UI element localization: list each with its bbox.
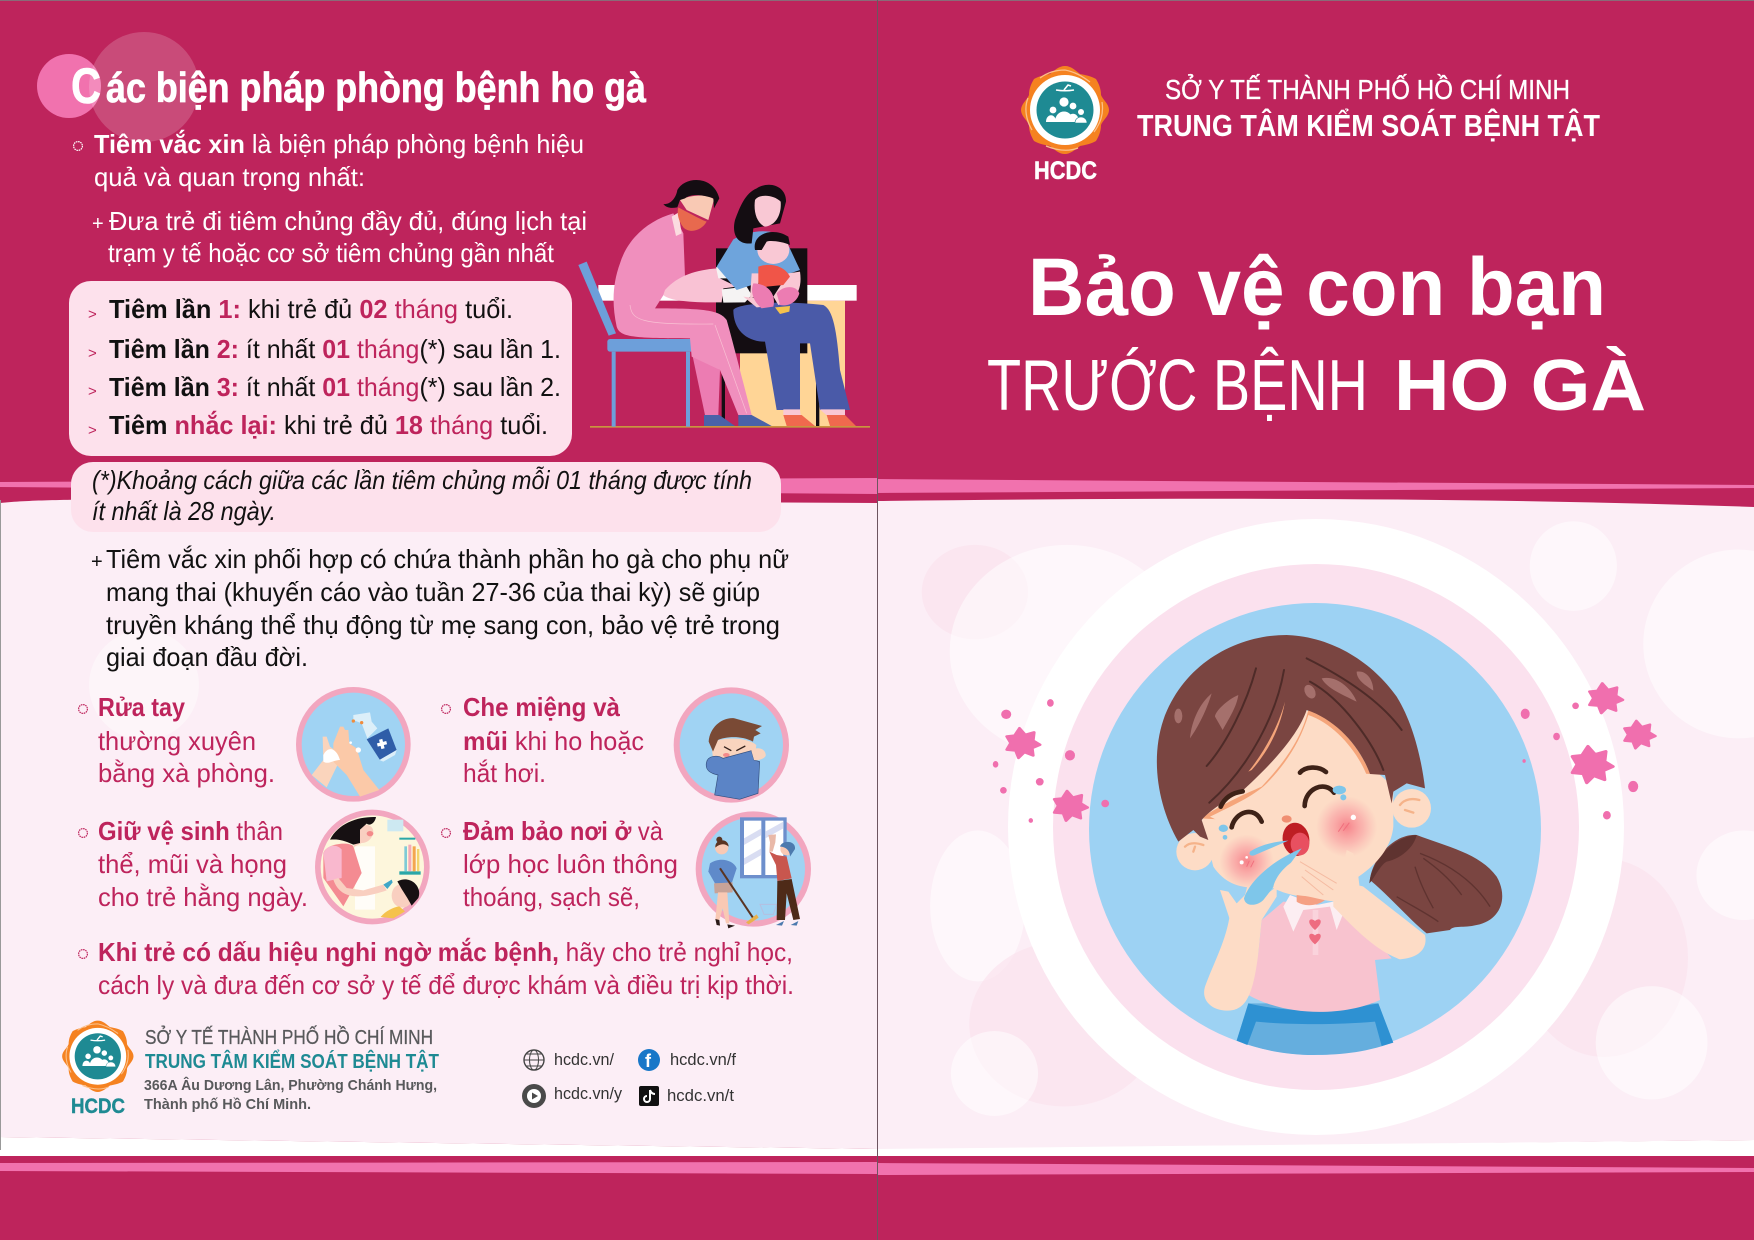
panel: cover bbox=[922, 66, 1754, 1135]
item: hygiene: Giữ vệ sinh thân bbox=[98, 816, 283, 846]
girl: tears bbox=[1219, 825, 1228, 832]
illustration: nurse vaccinating child bbox=[578, 180, 870, 428]
schedule: dose 3: Tiêm lần 3: ít nhất 01 tháng(*) sau lần 2. bbox=[109, 372, 561, 402]
footer: website: hcdc.vn/ bbox=[554, 1050, 614, 1069]
footer: tiktok: hcdc.vn/t bbox=[667, 1086, 734, 1105]
footer: youtube bbox=[522, 1084, 622, 1108]
schedule: booster: > bbox=[88, 422, 97, 439]
logo: HCDC: HCDC bbox=[71, 1095, 125, 1118]
schedule: dose 1: > bbox=[88, 306, 97, 323]
organisation name and address: TRUNG TÂM KIỂM SOÁT BỆNH TẬT bbox=[145, 1049, 439, 1073]
footer: youtube: hcdc.vn/y bbox=[554, 1084, 622, 1103]
footer: tiktok bbox=[639, 1086, 734, 1106]
text block: maternal vaccination: mang thai (khuyến cáo vào tuần 27-36 của thai kỳ) sẽ giúp bbox=[106, 577, 760, 607]
text block: maternal vaccination: Tiêm vắc xin phối hợp có chứa thành phần ho gà cho phụ nữ bbox=[106, 544, 789, 574]
girl: hand over mouth bbox=[1273, 850, 1360, 901]
text block: maternal vaccination: giai đoạn đầu đời. bbox=[106, 642, 308, 672]
title: Bảo vệ con bạn bbox=[1028, 242, 1606, 333]
item: hygiene: thể, mũi và họng bbox=[98, 849, 287, 879]
item: hand washing bbox=[79, 692, 275, 788]
organisation name and address bbox=[144, 1025, 439, 1113]
text block: maternal vaccination bbox=[91, 544, 789, 672]
title: TRƯỚC BỆNH bbox=[987, 346, 1368, 426]
text block: when child has symptoms: Khi trẻ có dấu hiệu nghi ngờ mắc bệnh, hãy cho trẻ nghỉ học, bbox=[98, 937, 793, 967]
heading: C bbox=[71, 58, 101, 114]
nurse chair bbox=[578, 262, 616, 336]
footnote box bbox=[71, 462, 781, 532]
footer: facebook: f bbox=[645, 1051, 652, 1071]
child bbox=[750, 273, 759, 298]
icon: cleaning window and floor bbox=[696, 811, 811, 928]
girl: raised arm bbox=[1204, 913, 1262, 1011]
nurse bbox=[704, 415, 772, 426]
item: hand washing: bằng xà phòng. bbox=[98, 758, 275, 788]
footnote box: (*)Khoảng cách giữa các lần tiêm chủng mỗi 01 tháng được tính bbox=[92, 465, 752, 495]
icon: hand washing bbox=[296, 687, 411, 802]
heading decoration circles bbox=[37, 32, 199, 142]
schedule: booster: Tiêm nhắc lại: khi trẻ đủ 18 tháng tuổi. bbox=[109, 410, 548, 440]
item: hand washing: thường xuyên bbox=[98, 726, 256, 756]
text block: when child has symptoms bbox=[79, 937, 794, 1000]
background bubbles bbox=[922, 521, 1754, 1116]
girl: skirt bbox=[1237, 1003, 1393, 1055]
organisation header bbox=[1137, 73, 1600, 143]
girl: nose and mouth bbox=[1282, 815, 1292, 823]
title bbox=[987, 242, 1646, 426]
text block: vaccination intro: + bbox=[92, 213, 104, 235]
text block: when child has symptoms: cách ly và đưa đến cơ sở y tế để được khám và điều trị kịp thời. bbox=[98, 970, 794, 1000]
organisation name and address: 366A Âu Dương Lân, Phường Chánh Hưng, bbox=[144, 1076, 437, 1094]
organisation name and address: Thành phố Hồ Chí Minh. bbox=[144, 1096, 311, 1113]
girl: face bbox=[1202, 710, 1393, 897]
item: cover mouth: mũi khi ho hoặc bbox=[463, 726, 644, 756]
item: hygiene: cho trẻ hằng ngày. bbox=[98, 882, 308, 912]
footer: website bbox=[524, 1050, 614, 1070]
heading bbox=[71, 58, 647, 114]
heading: ác biện pháp phòng bệnh ho gà bbox=[106, 64, 647, 111]
girl: shirt bbox=[1248, 902, 1392, 1012]
organisation name and address: SỞ Y TẾ THÀNH PHỐ HỒ CHÍ MINH bbox=[145, 1025, 433, 1049]
girl: ponytail bbox=[1370, 835, 1502, 933]
schedule: dose 1: Tiêm lần 1: khi trẻ đủ 02 tháng tuổi. bbox=[109, 294, 513, 324]
item: clean classroom: Đảm bảo nơi ở và bbox=[463, 816, 663, 846]
item: clean classroom bbox=[442, 816, 678, 912]
schedule: dose 2: Tiêm lần 2: ít nhất 01 tháng(*) sau lần 1. bbox=[109, 334, 561, 364]
item: cover mouth bbox=[442, 692, 644, 788]
text block: vaccination intro: Đưa trẻ đi tiêm chủng đầy đủ, đúng lịch tại bbox=[109, 206, 587, 236]
schedule: dose 2: > bbox=[88, 345, 97, 362]
icon: coughing boy bbox=[674, 687, 789, 803]
girl: cheeks bbox=[1219, 834, 1274, 889]
footer: facebook bbox=[638, 1049, 736, 1071]
item: cover mouth: Che miệng và bbox=[463, 692, 620, 722]
portrait frame circles bbox=[1008, 519, 1624, 1135]
panel: prevention measures bbox=[37, 32, 870, 1118]
text block: vaccination intro: quả và quan trọng nhất: bbox=[94, 162, 365, 192]
footer: organisation bbox=[62, 1021, 439, 1118]
schedule: dose 3: > bbox=[88, 383, 97, 400]
item: hygiene bbox=[79, 816, 308, 912]
icon: mother cleaning child's nose bbox=[315, 810, 430, 924]
item: cover mouth: hắt hơi. bbox=[463, 758, 546, 788]
girl: hair bbox=[1201, 710, 1370, 820]
footnote box: ít nhất là 28 ngày. bbox=[92, 496, 276, 526]
mother bbox=[717, 231, 800, 290]
item: clean classroom: thoáng, sạch sẽ, bbox=[463, 882, 640, 912]
girl: arm to mouth bbox=[1333, 886, 1426, 959]
item: clean classroom: lớp học luôn thông bbox=[463, 849, 678, 879]
logo: HCDC bbox=[62, 1021, 134, 1118]
germs around girl bbox=[993, 683, 1655, 823]
girl: eyes and brows bbox=[1232, 787, 1334, 827]
logo: HCDC white: HCDC bbox=[1034, 157, 1097, 185]
text block: vaccination intro bbox=[74, 129, 587, 268]
organisation header: SỞ Y TẾ THÀNH PHỐ HỒ CHÍ MINH bbox=[1165, 73, 1570, 105]
text block: vaccination intro: Tiêm vắc xin là biện pháp phòng bệnh hiệu bbox=[94, 129, 584, 159]
text block: maternal vaccination: truyền kháng thể thụ động từ mẹ sang con, bảo vệ trẻ trong bbox=[106, 610, 780, 640]
footer: facebook: hcdc.vn/f bbox=[670, 1050, 736, 1069]
title: HO GÀ bbox=[1394, 346, 1646, 426]
girl: cough spray bbox=[1244, 841, 1302, 905]
text block: vaccination intro: trạm y tế hoặc cơ sở tiêm chủng gần nhất bbox=[108, 238, 555, 268]
logo: HCDC white bbox=[1021, 66, 1109, 185]
schedule box bbox=[69, 281, 572, 456]
organisation header: TRUNG TÂM KIỂM SOÁT BỆNH TẬT bbox=[1137, 107, 1600, 143]
illustration: coughing girl bbox=[1157, 635, 1502, 1055]
text block: maternal vaccination: + bbox=[91, 551, 103, 573]
item: hand washing: Rửa tay bbox=[98, 692, 185, 722]
